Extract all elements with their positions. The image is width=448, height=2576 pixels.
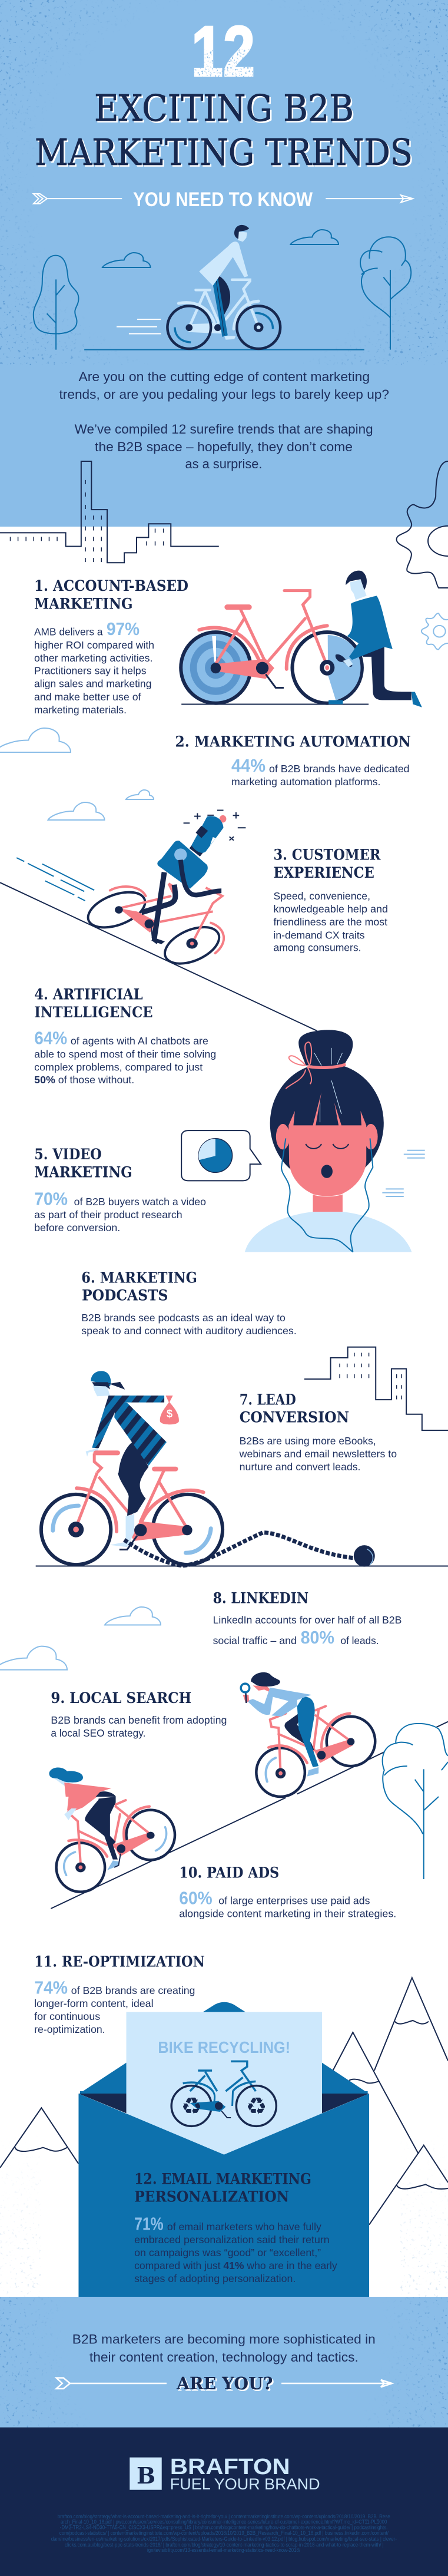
- speed lines: [117, 319, 161, 333]
- body text: 70%: [34, 1188, 68, 1209]
- illustration: mechanic fixing pink bike: [181, 571, 422, 707]
- envelope: [78, 2002, 369, 2297]
- icon: left tree: [34, 256, 78, 350]
- body text: other marketing activities.: [34, 652, 153, 664]
- body text: [179, 1887, 396, 1920]
- sources: -DM2-TR2-LS4-ND30-TTA5-CN_CISCX3-USPR&eq=press_US | brafton.com/blog/content-marketing/how-do-chatbots-work-a-tactical-guide/ | podcastinsights.: [60, 2525, 387, 2531]
- title: [35, 87, 413, 174]
- body text: [239, 1435, 397, 1473]
- arrows beside closing question: [57, 2378, 392, 2389]
- heading: 8. LINKEDIN: [213, 1590, 308, 1607]
- body text: higher ROI compared with: [34, 639, 154, 651]
- illustration: thief on bicycle with ball and chain: [36, 1371, 448, 1567]
- heading: MARKETING: [34, 595, 133, 613]
- title: MARKETING TRENDS: [35, 131, 413, 174]
- speed lines: [16, 858, 94, 901]
- body text: compared with just 41% who are in the early: [134, 2260, 337, 2271]
- heading: 2. MARKETING AUTOMATION: [175, 733, 411, 750]
- slope line uphill: [51, 1722, 448, 1909]
- sources: com/podcast-statistics/ | contentmarketinginstitute.com/wp-content/uploads/2018/10/2019_B2B_Research_Final-10_10_18.pdf | business.linkedin.com/content/: [59, 2530, 389, 2537]
- rider: [241, 1672, 318, 1777]
- face: [276, 1092, 378, 1197]
- body text: re-optimization.: [34, 2023, 105, 2035]
- body text: in-demand CX traits: [273, 929, 365, 941]
- closing question: ARE YOU?: [176, 2373, 273, 2393]
- body text: [273, 890, 388, 954]
- body text: [213, 1614, 401, 1648]
- rider bottom and bicycle: [57, 1797, 175, 1892]
- icon: recycling bicycle: [171, 2061, 276, 2126]
- section 12: email marketing personalization: [134, 2170, 337, 2284]
- panel: footer: [0, 2428, 448, 2576]
- clouds in hero: [102, 230, 339, 267]
- wheels: [79, 885, 228, 971]
- body text: 50% of those without.: [34, 1074, 134, 1086]
- clouds left of section 2: [0, 728, 154, 820]
- body text: complex problems, compared to just: [34, 1061, 203, 1073]
- logo: Brafton: [130, 2455, 320, 2493]
- heading: [134, 2170, 311, 2205]
- illustration: woman riding uphill: [49, 1768, 175, 1892]
- heading: [240, 1391, 349, 1426]
- body text: of leads.: [340, 1635, 379, 1646]
- body text: marketing automation platforms.: [231, 776, 380, 788]
- icon: tree by slope: [383, 1724, 448, 1879]
- speckles on white beside envelope: [0, 2168, 448, 2297]
- speech bubble with pie chart: [181, 1130, 261, 1180]
- body text: of B2B brands have dedicated: [269, 763, 410, 775]
- thief upper body: [86, 1371, 179, 1473]
- title: EXCITING B2B: [94, 87, 354, 130]
- section 10: paid ads: [179, 1864, 396, 1920]
- intro text: trends, or are you pedaling your legs to barely keep up?: [59, 387, 389, 402]
- body text: before conversion.: [34, 1222, 120, 1234]
- body text: of large enterprises use paid ads: [218, 1895, 370, 1907]
- body text: 44%: [231, 755, 266, 776]
- body text: of B2B brands are creating: [71, 1985, 195, 1996]
- closing text: B2B marketers are becoming more sophisticated in: [72, 2332, 376, 2346]
- body text: 64%: [34, 1027, 67, 1049]
- sound lines: [382, 1150, 425, 1196]
- ground line: [84, 349, 364, 350]
- wheels: [256, 1717, 375, 1797]
- body text: webinars and email newsletters to: [239, 1448, 397, 1460]
- body text: [34, 619, 154, 716]
- heading: [81, 1269, 197, 1304]
- heading: 5. VIDEO: [34, 1146, 102, 1163]
- title number 12: 12: [191, 11, 255, 91]
- illustration: robot downhill cyclist: [16, 810, 245, 971]
- illustration: woman with magnifying glass on bicycle: [241, 1672, 375, 1797]
- body text: alongside content marketing in their strategies.: [179, 1908, 396, 1920]
- body text: [81, 1312, 297, 1337]
- subtitle: YOU NEED TO KNOW: [133, 189, 313, 211]
- body text: [51, 1714, 227, 1739]
- body text: marketing materials.: [34, 704, 127, 716]
- rear wheel with target: [181, 632, 251, 703]
- heading: [34, 1146, 132, 1180]
- body text: a local SEO strategy.: [51, 1727, 145, 1739]
- back flap and side flaps: [81, 2002, 367, 2092]
- closing text: [72, 2332, 376, 2365]
- body text: B2B brands can benefit from adopting: [51, 1714, 227, 1726]
- bicycle: [167, 280, 280, 349]
- closing text: their content creation, technology and tactics.: [89, 2350, 359, 2365]
- body text: as part of their product research: [34, 1209, 182, 1221]
- intro text: Are you on the cutting edge of content marketing: [79, 369, 370, 384]
- heading: 11. RE-OPTIMIZATION: [34, 1953, 205, 1970]
- bicycle and chain: [36, 1473, 448, 1567]
- letter and envelope front: [78, 2012, 369, 2297]
- body text: and make better use of: [34, 691, 141, 703]
- body text: [34, 1977, 195, 2035]
- rider: [199, 225, 249, 340]
- heading: 7. LEAD: [240, 1391, 296, 1408]
- body text: able to spend most of their time solving: [34, 1048, 216, 1060]
- body text: for continuous: [34, 2010, 100, 2022]
- section 8: linkedin: [213, 1590, 401, 1648]
- body text: [34, 1027, 216, 1086]
- body text: [231, 755, 410, 788]
- frame: [199, 591, 334, 687]
- icon: large gear: [397, 461, 448, 588]
- heading: CONVERSION: [240, 1408, 349, 1426]
- section 7: lead conversion: [239, 1391, 397, 1473]
- heading: 3. CUSTOMER: [273, 846, 381, 864]
- body text: 80%: [301, 1627, 334, 1648]
- heading: PERSONALIZATION: [134, 2188, 289, 2205]
- hero illustration: cyclist, trees and clouds: [34, 225, 411, 350]
- skyline top left: [0, 461, 219, 563]
- body text: social traffic – and: [213, 1635, 297, 1646]
- ribbon: [286, 1042, 346, 1089]
- section 5: video marketing: [34, 1146, 206, 1234]
- intro text: the B2B space – hopefully, they don’t come: [95, 439, 353, 454]
- skyline section 7: [304, 1347, 448, 1430]
- earphone cables: [281, 1138, 373, 1252]
- sources: [51, 2514, 397, 2554]
- heading: 9. LOCAL SEARCH: [51, 1689, 191, 1707]
- heading: INTELLIGENCE: [34, 1004, 153, 1021]
- logo letter: B: [137, 2462, 155, 2489]
- arrows beside subtitle: [34, 194, 413, 204]
- body text: Speed, convenience,: [273, 890, 370, 902]
- icon: recycling bicycle: ♻: [181, 2093, 202, 2120]
- body text: of B2B buyers watch a video: [74, 1196, 206, 1208]
- section 2: marketing automation: [175, 733, 411, 788]
- intro text: as a surprise.: [185, 457, 263, 471]
- heading: 4. ARTIFICIAL: [34, 986, 143, 1003]
- body text: AMB delivers a: [34, 626, 103, 638]
- mountains: [0, 1978, 448, 2225]
- heading: [34, 577, 188, 613]
- panel: hero background: [0, 0, 448, 527]
- sources: arch_Final-10_10_18.pdf | pwc.com/us/en/services/consulting/library/consumer-intelligence-series/future-of-customer-experience.html?WT.mc_id=CT11-PL1000: [61, 2519, 387, 2525]
- clouds near section 8: [0, 1607, 161, 1670]
- heading: EXPERIENCE: [273, 864, 374, 881]
- body text: embraced personalization said their return: [134, 2234, 330, 2246]
- illustration: woman with earphones: [245, 1030, 412, 1252]
- icon: logo square: [130, 2458, 162, 2490]
- frame: [110, 884, 224, 953]
- heading: MARKETING: [34, 1163, 132, 1180]
- rider: [141, 816, 224, 944]
- money bag dollar sign: $: [167, 1408, 172, 1420]
- slope line: [0, 882, 317, 1031]
- body text: 74%: [34, 1977, 68, 1998]
- body text: align sales and marketing: [34, 678, 152, 690]
- heading: 10. PAID ADS: [179, 1864, 279, 1881]
- body text: 60%: [179, 1887, 213, 1908]
- body text: friendliness are the most: [273, 916, 387, 928]
- heading: [34, 986, 153, 1021]
- body text: speak to and connect with auditory audiences.: [81, 1325, 297, 1337]
- body text: longer-form content, ideal: [34, 1998, 154, 2009]
- section 6: marketing podcasts: [81, 1269, 297, 1337]
- mechanic: [328, 571, 422, 707]
- frame: [266, 1706, 354, 1781]
- heading: [273, 846, 381, 881]
- body text: Practitioners say it helps: [34, 665, 147, 677]
- intro text: We’ve compiled 12 surefire trends that are shaping: [75, 422, 373, 437]
- sources: ignitevisibility.com/13-essential-email-marketing-statistics-need-know-2018/: [147, 2547, 300, 2554]
- body text: B2B brands see podcasts as an ideal way to: [81, 1312, 286, 1324]
- heading: 6. MARKETING: [81, 1269, 197, 1286]
- sources: clicks.com.au/blog/best-ppc-stats-trends-2018/ | brafton.com/blog/strategy/10-content-marketing-tactics-to-scrap-in-2018-and-what-to-replace-them-with/ |: [65, 2542, 384, 2548]
- section 4: artificial intelligence: [34, 986, 216, 1086]
- neck and shoulders: [245, 1192, 412, 1252]
- icon: recycling bicycle: ♻: [246, 2093, 267, 2120]
- front wheel: [293, 632, 362, 703]
- body text: nurture and convert leads.: [240, 1461, 360, 1473]
- section 1: account-based marketing: [34, 577, 188, 716]
- section 9: local search: [51, 1689, 227, 1739]
- body text: on campaigns was “good” or “excellent,”: [134, 2247, 321, 2258]
- rider top: [49, 1768, 116, 1797]
- brand name: BRAFTON: [170, 2455, 290, 2479]
- section 3: customer experience: [273, 846, 388, 954]
- intro text: [59, 369, 389, 471]
- tagline: FUEL YOUR BRAND: [170, 2475, 320, 2493]
- body text: among consumers.: [273, 942, 361, 954]
- body text: [34, 1188, 206, 1234]
- hair: [270, 1030, 384, 1183]
- ground line: [181, 704, 369, 705]
- sparks: [184, 810, 245, 841]
- body text: [134, 2213, 337, 2284]
- closing band background: [0, 2297, 448, 2428]
- icon: right tree: [360, 237, 411, 350]
- heading: 1. ACCOUNT-BASED: [34, 577, 188, 594]
- body text: B2Bs are using more eBooks,: [240, 1435, 376, 1447]
- body text: knowledgeable help and: [273, 903, 388, 915]
- body text: of agents with AI chatbots are: [71, 1035, 208, 1047]
- heading: 12. EMAIL MARKETING: [134, 2170, 311, 2187]
- heading: PODCASTS: [82, 1287, 168, 1304]
- body text: LinkedIn accounts for over half of all B2B: [213, 1614, 401, 1626]
- body text: of email marketers who have fully: [167, 2221, 321, 2233]
- section 11: re-optimization: [34, 1953, 205, 2035]
- body text: stages of adopting personalization.: [134, 2273, 296, 2284]
- letter heading: bike recycling: BIKE RECYCLING!: [158, 2038, 290, 2056]
- icon: small gear: [422, 613, 448, 650]
- body text: 97%: [107, 619, 140, 639]
- body text: 71%: [134, 2213, 164, 2234]
- sources: brafton.com/blog/strategy/what-is-account-based-marketing-and-is-it-right-for-you/ | contentmarketinginstitute.com/wp-content/uploads/2018/10/2019_B2B_Rese: [58, 2514, 390, 2520]
